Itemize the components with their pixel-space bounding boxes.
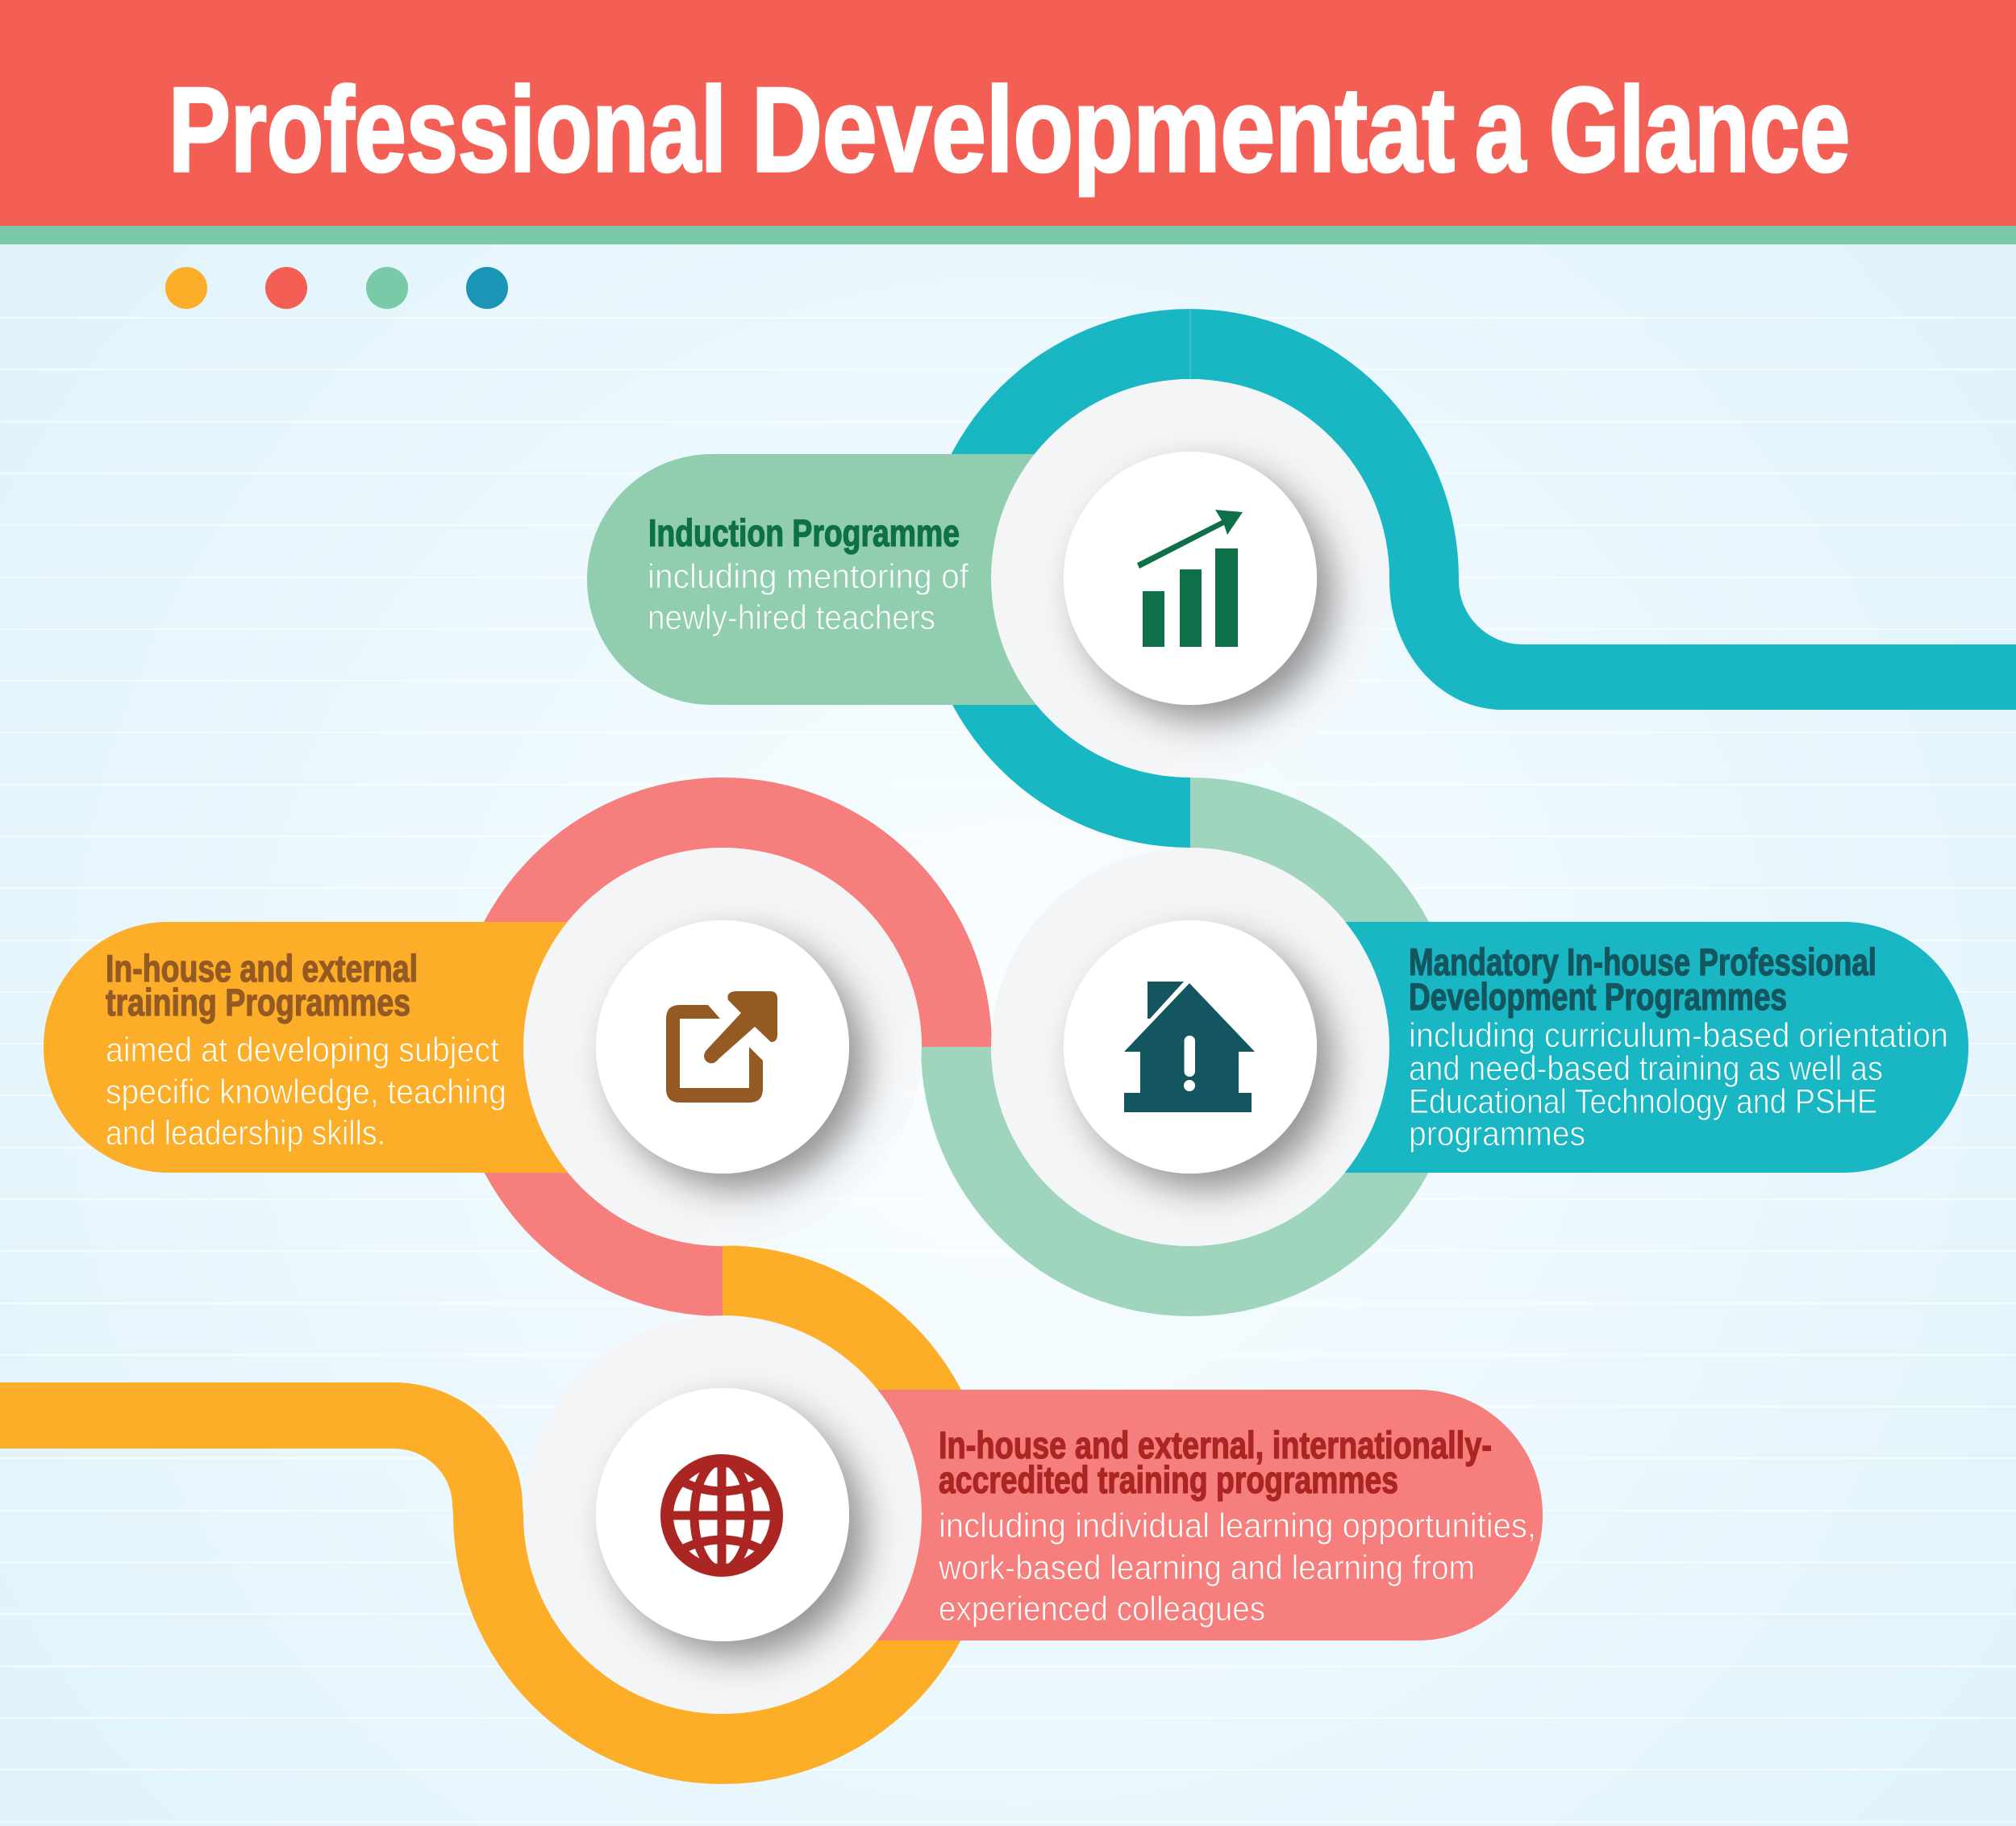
decorative colour dots <box>165 267 508 309</box>
icon: globe <box>667 1461 777 1570</box>
body: internationally-accredited: including individual learning opportunities, <box>939 1507 1536 1545</box>
body: mandatory in-house: including curriculum-based orientation <box>1409 1016 1948 1055</box>
body: in-house and external: and leadership skills. <box>106 1114 385 1153</box>
body: internationally-accredited: work-based learning and learning from <box>938 1549 1475 1587</box>
ribbon: teal <box>921 309 2016 848</box>
heading: in-house and external <box>106 947 418 1023</box>
body: in-house and external: specific knowledge, teaching <box>106 1073 506 1111</box>
body: mandatory in-house: programmes <box>1409 1115 1585 1153</box>
ribbon: orange <box>0 1245 992 1784</box>
title: a <box>1475 62 1527 197</box>
title: Professional <box>169 62 727 197</box>
body: internationally-accredited <box>938 1507 1536 1628</box>
heading: induction programme: Induction Programme <box>648 511 960 554</box>
body: internationally-accredited: experienced colleagues <box>939 1590 1265 1628</box>
body: induction programme <box>648 557 969 637</box>
icon: house with exclamation mark <box>1124 982 1255 1112</box>
body: induction programme: including mentoring of <box>648 557 969 596</box>
body: mandatory in-house: Educational Technology and PSHE <box>1409 1082 1877 1121</box>
body: in-house and external: aimed at developing subject <box>106 1031 499 1069</box>
node: induction <box>991 379 1389 778</box>
panel: internationally-accredited programmes <box>726 1390 1543 1640</box>
title: Glance <box>1549 62 1850 197</box>
title <box>169 62 1850 197</box>
heading: in-house and external: training Programmes <box>106 981 410 1023</box>
panel: induction programme <box>587 454 1232 705</box>
panel: mandatory in-house programmes <box>1210 922 1968 1173</box>
heading: internationally-accredited: In-house and external, internationally- <box>939 1424 1492 1466</box>
body: mandatory in-house <box>1409 1016 1948 1153</box>
heading: in-house and external: In-house and external <box>106 947 418 990</box>
node: in-house and external <box>523 848 922 1246</box>
body: induction programme: newly-hired teachers <box>648 598 935 637</box>
ribbon: mint <box>921 778 1460 1316</box>
header green strip <box>0 226 2016 244</box>
body: in-house and external <box>106 1031 506 1153</box>
ribbon: pink <box>453 778 992 1316</box>
heading: internationally-accredited <box>939 1424 1492 1501</box>
icon: external link <box>666 991 777 1103</box>
header banner <box>0 0 2016 226</box>
heading: mandatory in-house: Development Programmes <box>1409 975 1787 1018</box>
node: mandatory <box>991 848 1389 1246</box>
panel: in-house and external training <box>44 922 769 1173</box>
body: mandatory in-house: and need-based training as well as <box>1409 1049 1883 1088</box>
heading: mandatory in-house <box>1409 940 1876 1018</box>
heading: internationally-accredited: accredited training programmes <box>939 1458 1398 1501</box>
title: Developmentat <box>752 62 1455 197</box>
heading: mandatory in-house: Mandatory In-house Professional <box>1409 940 1876 983</box>
icon: rising bar chart <box>1137 510 1243 647</box>
node: internationally-accredited <box>523 1315 922 1714</box>
